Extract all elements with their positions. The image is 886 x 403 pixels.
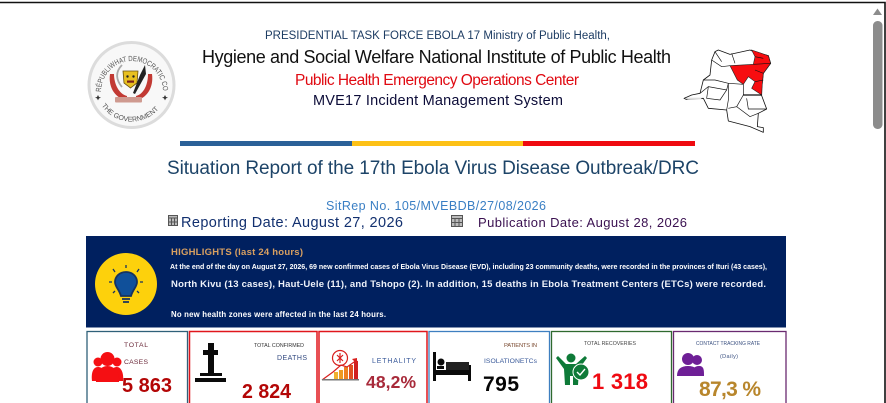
- card: lethality: 48,2%: [366, 372, 416, 392]
- panel: highlights: [86, 236, 786, 328]
- highlights text: At the end of the day on August 27, 2026, 69 new confirmed cases of Ebola Virus Disease (EVD), including 23 community deaths, were recorded in the provinces of Ituri (43 cases),: [170, 262, 767, 271]
- card: contact tracking rate: CONTACT TRACKING RATE: [696, 341, 760, 347]
- calendar icon: reporting date: [168, 216, 178, 226]
- sitrep number: SitRep No. 105/MVEBDB/27/08/2026: [326, 199, 546, 213]
- card: patients in isolation: [429, 332, 550, 403]
- header organisation text: Public Health Emergency Operations Center: [295, 72, 579, 89]
- card: total confirmed deaths: 2 824: [242, 380, 292, 403]
- seal stars: [95, 95, 168, 100]
- card: total confirmed deaths: [190, 332, 317, 403]
- header organisation text: PRESIDENTIAL TASK FORCE EBOLA 17 Ministry of Public Health,: [265, 30, 610, 42]
- highlights heading: HIGHLIGHTS (last 24 hours): [171, 247, 303, 258]
- calendar icon: publication date: [452, 216, 462, 226]
- icon: grave cross: [195, 343, 226, 382]
- card: total cases: 5 863: [122, 374, 172, 397]
- card: patients in isolation: ISOLATIONETCs: [484, 358, 538, 365]
- header organisation text: MVE17 Incident Management System: [313, 93, 563, 109]
- reporting date: Reporting Date: August 27, 2026: [181, 215, 403, 231]
- seal emblem: [110, 65, 152, 102]
- card: lethality: [319, 332, 427, 403]
- card: total confirmed deaths: TOTAL CONFIRMED: [254, 343, 304, 349]
- icon: rising lethality chart: [322, 350, 359, 380]
- card: contact tracking rate: [674, 332, 786, 403]
- card: lethality: LETHALITY: [372, 358, 416, 365]
- government seal logo: [88, 41, 176, 129]
- card: total cases: TOTAL: [124, 342, 148, 349]
- icon: recovered person with check: [556, 354, 589, 385]
- highlights text: [170, 262, 767, 319]
- card: total cases: [87, 332, 188, 403]
- card: total recoveries: 1 318: [592, 369, 648, 394]
- icon: group of people: [92, 352, 123, 382]
- scrollbar: [873, 8, 882, 129]
- publication date: Publication Date: August 28, 2026: [478, 215, 687, 230]
- card: total confirmed deaths: DEATHS: [277, 355, 307, 362]
- icon: two people: [677, 353, 704, 376]
- card: total recoveries: TOTAL RECOVERIES: [584, 341, 636, 347]
- card: total cases: CASES: [124, 359, 148, 366]
- seal lower inscription: THE GOVERNMENT: [102, 102, 158, 122]
- icon: light bulb: [95, 253, 157, 315]
- header organisation text: [202, 30, 671, 109]
- highlights text: No new health zones were affected in the last 24 hours.: [171, 310, 386, 319]
- card: patients in isolation: 795: [483, 373, 519, 396]
- DRC map with affected provinces: [684, 50, 771, 132]
- card: total recoveries: [552, 332, 672, 403]
- icon: bed: [433, 352, 471, 381]
- tricolour divider: [180, 141, 695, 146]
- card: patients in isolation: PATIENTS IN: [504, 343, 537, 349]
- report title: Situation Report of the 17th Ebola Virus Disease Outbreak/DRC: [167, 158, 699, 179]
- card: contact tracking rate: 87,3 %: [699, 378, 761, 401]
- card: contact tracking rate: (Daily): [720, 354, 738, 360]
- highlights text: North Kivu (13 cases), Haut-Uele (11), and Tshopo (2). In addition, 15 deaths in Ebola Treatment Centers (ETCs) were recorded.: [171, 279, 766, 290]
- header organisation text: Hygiene and Social Welfare National Institute of Public Health: [202, 47, 671, 67]
